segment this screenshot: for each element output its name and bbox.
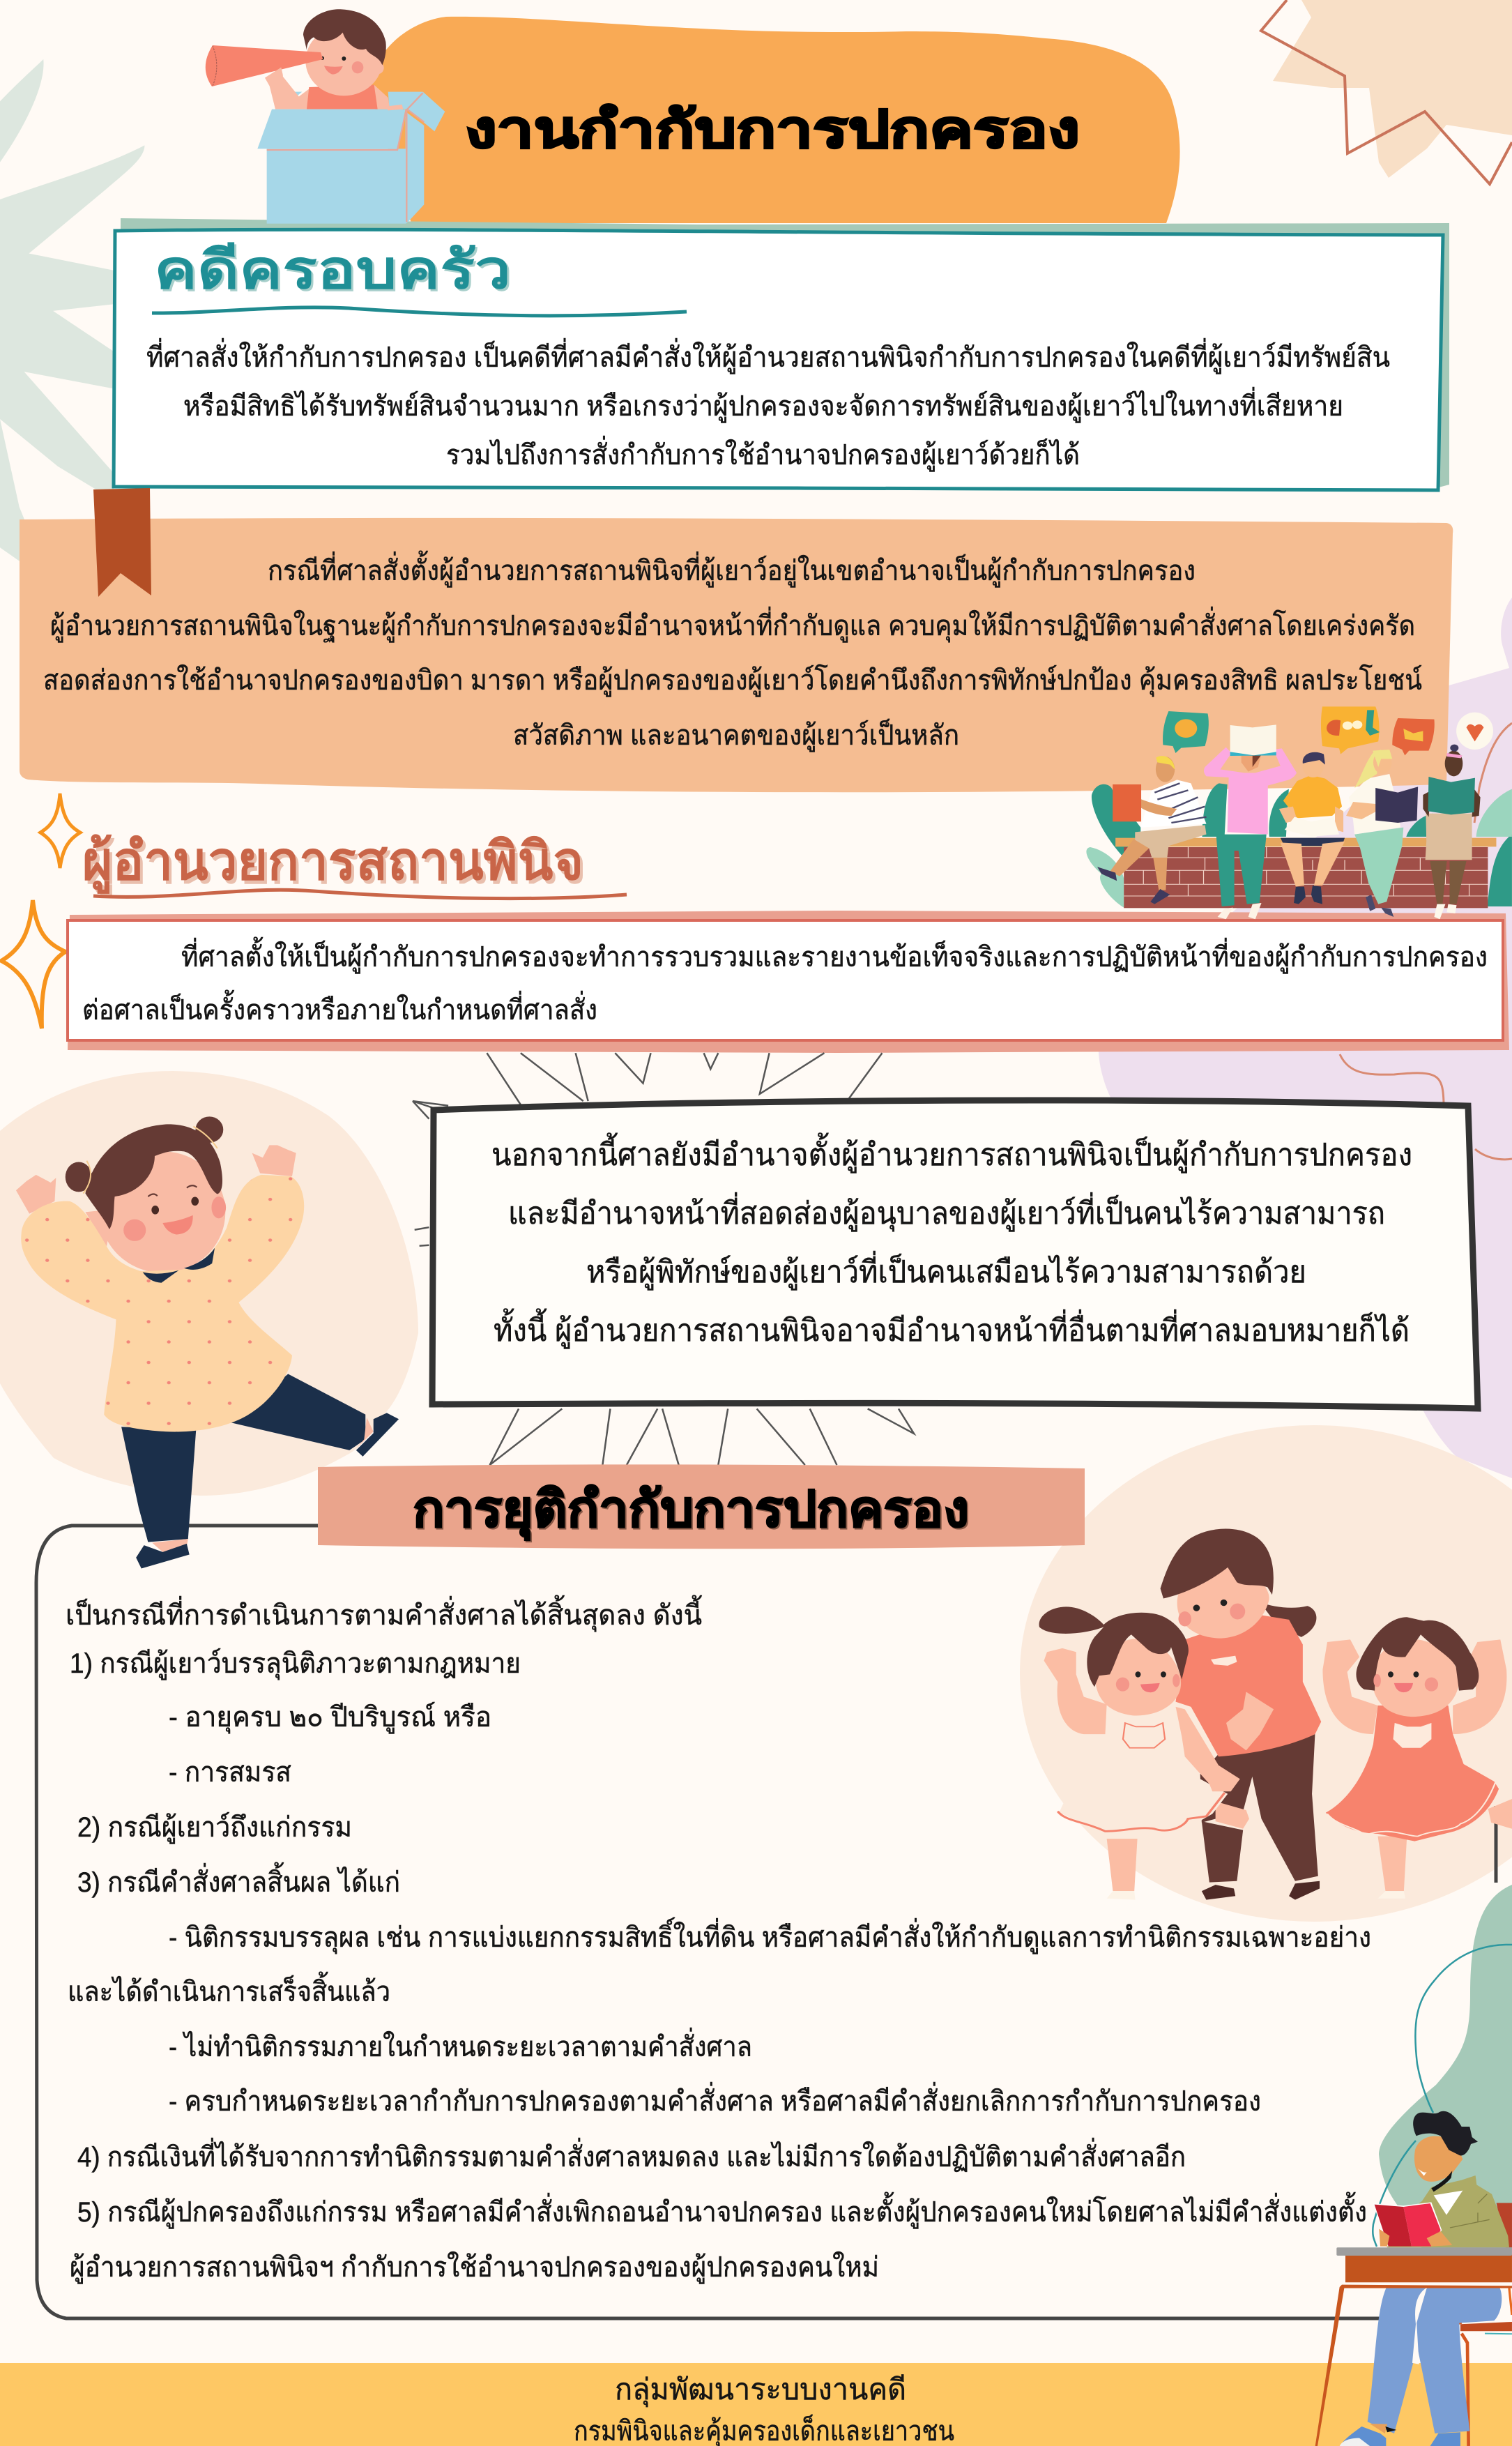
background leaf: green plant top-left	[0, 59, 144, 568]
title: งานกำกับการปกครอง	[465, 100, 1080, 158]
plants	[1092, 783, 1512, 906]
head	[1414, 2136, 1463, 2182]
icon: large sparkle	[1, 900, 66, 1028]
heading underline	[152, 307, 687, 316]
text block: director duties description: ต่อศาลเป็นครั้งคราวหรือภายในกำหนดที่ศาลสั่ง	[82, 989, 597, 1026]
text block: director appointed description	[43, 550, 1422, 752]
book	[1373, 2202, 1442, 2247]
person 1	[1135, 825, 1207, 858]
text block: additional powers description	[491, 1132, 1412, 1349]
desk	[1345, 2254, 1512, 2282]
shirt	[307, 85, 378, 109]
background shape: purple blob right	[1099, 598, 1512, 1478]
illustration: people reading on brick wall	[1086, 706, 1512, 919]
arm	[265, 68, 309, 109]
panel: family case	[114, 218, 1449, 490]
person 3	[1281, 838, 1345, 846]
box	[406, 112, 424, 223]
mother	[1200, 1734, 1318, 1881]
background shape: sun top-right	[1261, 0, 1512, 184]
heading banner: termination	[318, 1464, 1085, 1549]
text block: termination conditions: - ไม่ทำนิติกรรมภายในกำหนดระยะเวลาตามคำสั่งศาล	[169, 2028, 752, 2063]
text block: termination conditions: เป็นกรณีที่การดำเนินการตามคำสั่งศาลได้สิ้นสุดลง ดังนี้	[66, 1595, 703, 1632]
text block: director appointed description: สวัสดิภาพ และอนาคตของผู้เยาว์เป็นหลัก	[513, 718, 959, 752]
panel: director appointed	[20, 488, 1453, 792]
hair	[85, 1124, 222, 1229]
background shape: green blob bottom-right	[1373, 1885, 1512, 2249]
footer text: department name: กรมพินิจและคุ้มครองเด็กและเยาวชน	[574, 2414, 954, 2446]
head	[305, 26, 382, 96]
text block: director appointed description: กรณีที่ศาลสั่งตั้งผู้อำนวยการสถานพินิจที่ผู้เยาว์อยู่ในเขตอำนาจเป็นผู้กำกับการปกครอง	[268, 550, 1196, 587]
text block: director duties description	[82, 936, 1488, 1026]
text block: additional powers description: นอกจากนี้ศาลยังมีอำนาจตั้งผู้อำนวยการสถานพินิจเป็นผู้กำกับการปกครอง	[491, 1132, 1412, 1173]
legs	[1368, 2288, 1502, 2433]
buns	[66, 1162, 92, 1192]
heading: juvenile center director: ผู้อำนวยการสถานพินิจ	[82, 832, 583, 894]
icon: small sparkle	[40, 793, 80, 868]
heading underline	[93, 890, 627, 899]
footer band	[0, 2363, 1512, 2446]
illustration: mother and two daughters	[1039, 1528, 1512, 1900]
person 2	[1216, 835, 1267, 906]
text block: termination conditions: 3) กรณีคำสั่งศาลสิ้นผล ได้แก่	[77, 1862, 400, 1898]
sweater	[21, 1175, 304, 1431]
text block: termination conditions: 4) กรณีเงินที่ได้รับจากการทำนิติกรรมตามคำสั่งศาลหมดลง และไม่มีการใดต้องปฏิบัติตามคำสั่งศาลอีก	[77, 2138, 1186, 2173]
face details	[123, 1220, 146, 1241]
footer text: unit name: กลุ่มพัฒนาระบบงานคดี	[615, 2373, 906, 2408]
panel: additional powers	[432, 1100, 1478, 1408]
text block: termination conditions: - การสมรส	[169, 1757, 291, 1788]
speech bubbles	[1163, 711, 1209, 753]
text block: additional powers description: และมีอำนาจหน้าที่สอดส่องผู้อนุบาลของผู้เยาว์ที่เป็นคนไร้ความสามารถ	[508, 1192, 1385, 1232]
telescope	[206, 45, 323, 86]
text block: additional powers description: หรือผู้พิทักษ์ของผู้เยาว์ที่เป็นคนเสมือนไร้ความสามารถด้วย	[586, 1250, 1306, 1291]
heading: termination: การยุติกำกับการปกครอง	[413, 1482, 969, 1541]
collar	[143, 1248, 215, 1283]
box back flap	[293, 92, 423, 109]
text block: termination conditions: 1) กรณีผู้เยาว์บรรลุนิติภาวะตามกฎหมาย	[70, 1648, 521, 1680]
text block: termination conditions: 2) กรณีผู้เยาว์ถึงแก่กรรม	[77, 1811, 352, 1844]
text block: termination conditions: - อายุครบ ๒๐ ปีบริบูรณ์ หรือ	[169, 1701, 491, 1734]
chair	[1460, 2322, 1512, 2331]
left daughter	[1107, 1839, 1138, 1891]
text block: family case description: ที่ศาลสั่งให้กำกับการปกครอง เป็นคดีที่ศาลมีคำสั่งให้ผู้อำนวยสถานพินิจกำกับการปกครองในคดีที่ผู้เยาว์มีทรัพย์สิน	[146, 338, 1390, 374]
person 5	[1426, 814, 1472, 860]
person 4	[1354, 828, 1403, 904]
panel: director duties	[68, 911, 1509, 1053]
text block: additional powers description: ทั้งนี้ ผู้อำนวยการสถานพินิจอาจมีอำนาจหน้าที่อื่นตามที่ศาลมอบหมายก็ได้	[494, 1308, 1410, 1349]
desk legs	[1315, 2285, 1512, 2446]
background shape: beige circle right	[1020, 1425, 1512, 1922]
wall	[1124, 847, 1488, 908]
panel: guardianship termination	[36, 1526, 1496, 2318]
text block: family case description: หรือมีสิทธิได้รับทรัพย์สินจำนวนมาก หรือเกรงว่าผู้ปกครองจะจัดการทรัพย์สินของผู้เยาว์ไปในทางที่เสียหาย	[183, 387, 1343, 423]
legs	[121, 1427, 196, 1542]
starburst lines behind additional powers panel	[413, 1053, 914, 1465]
background shape: beige circle left	[0, 1071, 418, 1496]
shoes	[1340, 2426, 1386, 2446]
hair	[303, 9, 386, 65]
head	[100, 1151, 225, 1273]
title blob	[369, 17, 1180, 223]
text block: termination conditions: - ครบกำหนดระยะเวลากำกับการปกครองตามคำสั่งศาล หรือศาลมีคำสั่งยกเลิกการกำกับการปกครอง	[169, 2082, 1261, 2117]
text block: termination conditions: และได้ดำเนินการเสร็จสิ้นแล้ว	[68, 1971, 390, 2007]
right daughter	[1378, 1837, 1407, 1891]
text block: family case description	[146, 338, 1390, 471]
torso	[1382, 2175, 1509, 2247]
illustration: young man reading at desk	[1315, 2111, 1512, 2446]
text block: termination conditions: ผู้อำนวยการสถานพินิจฯ กำกับการใช้อำนาจปกครองของผู้ปกครองคนใหม่	[70, 2251, 879, 2284]
heading: family case: คดีครอบครัว	[154, 241, 511, 300]
illustration: child in box with telescope	[206, 9, 445, 224]
face details	[352, 61, 363, 73]
text block: termination conditions: - นิติกรรมบรรลุผล เช่น การแบ่งแยกกรรมสิทธิ์ในที่ดิน หรือศาลมีคำสั่งให้กำกับดูแลการทำนิติกรรมเฉพาะอย่าง	[169, 1917, 1371, 1954]
hands	[16, 1175, 56, 1214]
illustration: dancing girl	[16, 1116, 399, 1569]
text block: termination conditions	[66, 1595, 1371, 2284]
text block: termination conditions: 5) กรณีผู้ปกครองถึงแก่กรรม หรือศาลมีคำสั่งเพิกถอนอำนาจปกครอง และตั้งผู้ปกครองคนใหม่โดยศาลไม่มีคำสั่งแต่งตั้ง	[77, 2191, 1367, 2228]
text block: family case description: รวมไปถึงการสั่งกำกับการใช้อำนาจปกครองผู้เยาว์ด้วยก็ได้	[446, 436, 1080, 471]
icon: bookmark ribbon	[93, 488, 151, 597]
